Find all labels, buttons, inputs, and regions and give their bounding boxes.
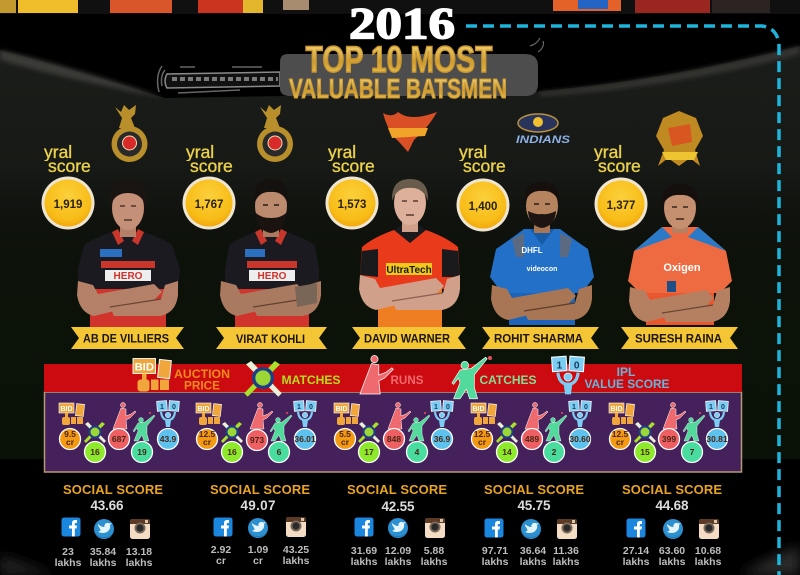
score column 5 bbox=[594, 142, 648, 230]
social values bbox=[351, 545, 448, 568]
social values: lakhs bbox=[90, 557, 117, 569]
team logo: Gujarat Lions bbox=[656, 111, 703, 166]
coin 1,400: 1,400 bbox=[469, 201, 497, 213]
name ribbon: AB de Villiers bbox=[71, 327, 184, 349]
social values bbox=[623, 545, 722, 568]
social values: lakhs bbox=[421, 556, 448, 568]
social score: Virat Kohli bbox=[210, 482, 310, 567]
social values bbox=[55, 546, 153, 569]
value score bbox=[157, 401, 179, 450]
social total: 43.66 bbox=[90, 498, 124, 513]
team logo: Mumbai Indians: INDIANS bbox=[516, 134, 571, 146]
coin 1,377: 1,377 bbox=[607, 200, 635, 212]
stats: Rohit Sharma bbox=[471, 401, 591, 462]
auction price: cr bbox=[478, 437, 487, 447]
runs: 973 bbox=[250, 435, 264, 445]
social heading: SOCIAL SCORE bbox=[622, 482, 722, 497]
social score: Suresh Raina bbox=[622, 482, 722, 568]
social values bbox=[482, 545, 580, 568]
label: yral score bbox=[594, 144, 640, 172]
runs: 399 bbox=[662, 434, 676, 444]
legend: runs: RUNS bbox=[390, 373, 424, 387]
social values: 5.88 bbox=[424, 545, 444, 557]
social score: David Warner bbox=[347, 482, 448, 568]
score column 3 bbox=[326, 142, 378, 230]
social values: lakhs bbox=[126, 557, 153, 569]
value score: 1 bbox=[709, 404, 713, 411]
social heading: SOCIAL SCORE bbox=[347, 482, 447, 497]
label: yral score: yral bbox=[186, 142, 214, 162]
value score bbox=[706, 401, 728, 450]
label: yral score: yral bbox=[594, 142, 622, 162]
auction price: cr bbox=[66, 437, 75, 447]
player: AB de Villiers bbox=[77, 179, 180, 327]
social values: 1.09 bbox=[248, 544, 268, 556]
stats: David Warner bbox=[334, 401, 453, 462]
team logo: Royal Challengers 2 bbox=[257, 105, 293, 162]
social values: cr bbox=[216, 555, 226, 567]
label: yral score: score bbox=[598, 156, 641, 176]
purple panel body bbox=[44, 392, 742, 472]
matches: 14 bbox=[502, 447, 512, 457]
runs: 848 bbox=[387, 434, 401, 444]
catches: 6 bbox=[277, 447, 282, 457]
social values: 12.09 bbox=[385, 545, 411, 557]
catches: 7 bbox=[690, 447, 695, 457]
legend: matches bbox=[244, 361, 340, 397]
auction price: BID bbox=[335, 406, 348, 413]
auction price: BID bbox=[60, 406, 73, 413]
player: Rohit Sharma bbox=[490, 182, 594, 325]
score column 2 bbox=[182, 142, 236, 230]
social values: 97.71 bbox=[482, 545, 508, 557]
value score: 0 bbox=[172, 404, 176, 411]
label: yral score: yral bbox=[328, 142, 356, 162]
legend: catches bbox=[452, 356, 536, 399]
auction price: cr bbox=[341, 437, 350, 447]
team logo: Mumbai Indians bbox=[516, 114, 571, 146]
social values: lakhs bbox=[385, 556, 412, 568]
social score: AB de Villiers bbox=[55, 482, 163, 569]
player: AB de Villiers: HERO bbox=[114, 271, 143, 282]
social values: lakhs bbox=[520, 556, 547, 568]
catches: 2 bbox=[552, 447, 557, 457]
legend: IPL value score: IPL bbox=[617, 365, 635, 379]
social values: 27.14 bbox=[623, 545, 649, 557]
team logo: Royal Challengers 1 bbox=[112, 105, 148, 162]
social heading: SOCIAL SCORE bbox=[484, 482, 584, 497]
social values: 2.92 bbox=[211, 544, 231, 556]
value score: 43.9 bbox=[160, 434, 177, 444]
year 2016: 2016 bbox=[349, 0, 455, 48]
auction price: 12.5 bbox=[474, 429, 491, 439]
name ribbon: Virat Kohli: VIRAT KOHLI bbox=[236, 332, 305, 346]
social heading: SOCIAL SCORE bbox=[210, 482, 310, 497]
social icons bbox=[354, 518, 445, 538]
auction price: 12.5 bbox=[199, 429, 216, 439]
social values: 43.25 bbox=[283, 544, 309, 556]
social icons bbox=[62, 518, 150, 539]
name ribbon: Rohit Sharma: ROHIT SHARMA bbox=[494, 332, 583, 346]
name ribbon: Virat Kohli bbox=[216, 327, 327, 349]
player: David Warner: UltraTech bbox=[386, 265, 432, 276]
cricket bat graphic bbox=[158, 38, 543, 96]
matches: 15 bbox=[640, 447, 650, 457]
stats: Suresh Raina bbox=[609, 401, 728, 462]
social values: lakhs bbox=[55, 557, 82, 569]
matches: 16 bbox=[90, 447, 100, 457]
value score: 30.60 bbox=[569, 434, 591, 444]
social icons bbox=[626, 518, 719, 539]
legend: auction price: BID bbox=[135, 362, 154, 374]
value score: 0 bbox=[584, 404, 588, 411]
legend: matches: MATCHES bbox=[282, 373, 340, 387]
auction price: cr bbox=[203, 437, 212, 447]
team logo: Sunrisers Hyderabad bbox=[383, 112, 437, 152]
name ribbon: Rohit Sharma bbox=[482, 327, 599, 349]
auction price: BID bbox=[472, 406, 485, 413]
player: David Warner bbox=[359, 179, 460, 327]
social values: 13.18 bbox=[126, 546, 152, 558]
name ribbon: AB de Villiers: AB DE VILLIERS bbox=[83, 332, 169, 346]
legend: IPL value score bbox=[552, 356, 670, 394]
social icons bbox=[214, 517, 306, 538]
auction price bbox=[471, 403, 497, 450]
auction price: 12.5 bbox=[612, 429, 629, 439]
auction price bbox=[609, 403, 635, 450]
value score bbox=[569, 401, 591, 450]
label: yral score: score bbox=[190, 156, 233, 176]
auction price: 5.5 bbox=[339, 429, 351, 439]
auction price bbox=[196, 403, 222, 450]
score column 4 bbox=[456, 142, 510, 232]
name ribbon: Suresh Raina: SURESH RAINA bbox=[635, 332, 722, 346]
social total: 42.55 bbox=[382, 499, 415, 514]
name ribbon: Suresh Raina bbox=[621, 327, 738, 349]
value score: 1 bbox=[297, 404, 301, 411]
label: yral score bbox=[186, 144, 232, 172]
heading line 1: TOP 10 MOST bbox=[306, 39, 493, 80]
value score bbox=[294, 401, 316, 450]
value score: 30.81 bbox=[706, 434, 728, 444]
value score: 0 bbox=[309, 404, 313, 411]
legend: auction price: PRICE bbox=[184, 380, 220, 392]
auction price bbox=[334, 403, 360, 450]
label: yral score: score bbox=[463, 156, 506, 176]
auction price: 9.5 bbox=[64, 429, 76, 439]
social values: 63.60 bbox=[659, 545, 685, 557]
legend: runs bbox=[360, 356, 424, 394]
matches: 17 bbox=[364, 447, 374, 457]
auction price: BID bbox=[197, 406, 210, 413]
social values: 10.68 bbox=[695, 545, 721, 557]
label: yral score bbox=[458, 144, 506, 172]
coin 1,573: 1,573 bbox=[338, 199, 366, 211]
catches: 19 bbox=[137, 447, 147, 457]
value score: 0 bbox=[446, 404, 450, 411]
social values: lakhs bbox=[623, 556, 650, 568]
social values: lakhs bbox=[553, 556, 580, 568]
player: Virat Kohli: HERO bbox=[258, 271, 287, 282]
dashed cyan route line bbox=[466, 26, 779, 575]
player: Suresh Raina: Oxigen bbox=[663, 262, 701, 274]
auction price: cr bbox=[616, 437, 625, 447]
player: Rohit Sharma: videocon bbox=[527, 266, 557, 273]
stats panel bbox=[44, 356, 742, 472]
name ribbon: David Warner: DAVID WARNER bbox=[364, 332, 450, 346]
runs: 489 bbox=[525, 434, 539, 444]
social values: lakhs bbox=[482, 556, 509, 568]
matches: 16 bbox=[227, 447, 237, 457]
social values: cr bbox=[253, 555, 263, 567]
value score: 1 bbox=[160, 404, 164, 411]
value score: 36.9 bbox=[434, 434, 451, 444]
value score bbox=[431, 401, 453, 450]
social values: 36.64 bbox=[520, 545, 546, 557]
catches: 4 bbox=[415, 447, 420, 457]
runs: 687 bbox=[112, 434, 126, 444]
auction price bbox=[59, 403, 85, 450]
coin 1,919: 1,919 bbox=[54, 199, 82, 211]
coin 1,767: 1,767 bbox=[195, 199, 223, 211]
player: Suresh Raina bbox=[628, 184, 732, 325]
social total: 45.75 bbox=[518, 498, 551, 513]
social values: lakhs bbox=[695, 556, 722, 568]
label: yral score: score bbox=[332, 156, 375, 176]
social score: Rohit Sharma bbox=[482, 482, 584, 568]
legend: auction price: AUCTION bbox=[174, 369, 230, 381]
social values: lakhs bbox=[283, 555, 310, 567]
legend: IPL value score: 1 bbox=[556, 360, 562, 371]
red legend bar bbox=[44, 364, 742, 392]
legend: auction price bbox=[133, 358, 230, 392]
social values: 23 bbox=[62, 546, 74, 558]
social icons bbox=[484, 518, 577, 539]
heading line 2: VALUABLE BATSMEN bbox=[289, 73, 507, 104]
social values: 11.36 bbox=[553, 545, 579, 557]
value score: 1 bbox=[572, 404, 576, 411]
score column 1 bbox=[42, 142, 94, 230]
legend: IPL value score: 0 bbox=[574, 360, 580, 371]
label: yral score: yral bbox=[459, 142, 487, 162]
label: yral score: yral bbox=[44, 142, 72, 162]
label: yral score bbox=[44, 144, 90, 172]
player: Virat Kohli bbox=[220, 179, 321, 327]
value score: 0 bbox=[721, 404, 725, 411]
label: yral score: score bbox=[48, 156, 91, 176]
legend: IPL value score: VALUE SCORE bbox=[584, 377, 670, 391]
social values: lakhs bbox=[659, 556, 686, 568]
social values bbox=[211, 544, 310, 567]
label: yral score bbox=[328, 144, 374, 172]
auction price: BID bbox=[610, 406, 623, 413]
social values: 35.84 bbox=[90, 546, 116, 558]
name ribbon: David Warner bbox=[352, 327, 466, 349]
social values: 31.69 bbox=[351, 545, 377, 557]
stats: Virat Kohli bbox=[196, 401, 316, 462]
value score: 1 bbox=[434, 404, 438, 411]
player: Rohit Sharma: DHFL bbox=[521, 246, 543, 255]
stats: AB de Villiers bbox=[59, 401, 179, 462]
social values: lakhs bbox=[351, 556, 378, 568]
social total: 44.68 bbox=[656, 498, 689, 513]
title block bbox=[158, 0, 543, 104]
legend: catches: CATCHES bbox=[480, 373, 536, 387]
social total: 49.07 bbox=[240, 498, 276, 513]
top strip: cropped player jerseys bbox=[0, 0, 800, 14]
social heading: SOCIAL SCORE bbox=[63, 482, 163, 497]
value score: 36.01 bbox=[294, 434, 316, 444]
